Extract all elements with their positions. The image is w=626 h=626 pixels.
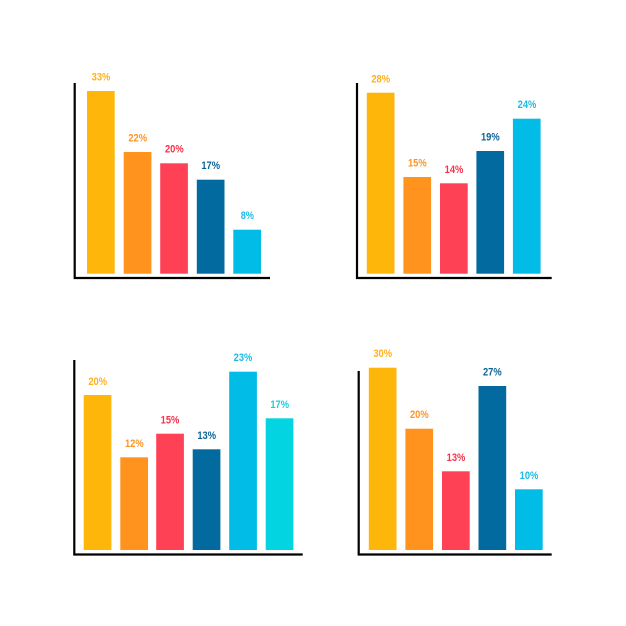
bar 22%: 22% bbox=[128, 132, 147, 144]
bar 14%: 14% bbox=[445, 164, 464, 176]
bar 8%: 8% bbox=[241, 210, 254, 222]
bar 20%: 20% bbox=[165, 144, 184, 156]
bar 20% bbox=[405, 409, 433, 550]
axes bbox=[75, 83, 270, 278]
bar 28%: 28% bbox=[371, 74, 390, 86]
bar 33%: 33% bbox=[92, 72, 111, 84]
bar 15%: 15% bbox=[408, 158, 427, 170]
bar 17% bbox=[197, 160, 224, 274]
bar 20% bbox=[160, 144, 188, 274]
bar 20%: 20% bbox=[88, 376, 107, 388]
bar 28% bbox=[367, 74, 394, 274]
bar 20% bbox=[84, 376, 111, 550]
bar 15% bbox=[403, 158, 431, 274]
bar 23%: 23% bbox=[234, 352, 253, 364]
bar 10%: 10% bbox=[520, 470, 539, 482]
bar 17% bbox=[266, 399, 293, 550]
bar 20%: 20% bbox=[410, 409, 429, 421]
bar 13%: 13% bbox=[197, 430, 216, 442]
bar 33% bbox=[87, 72, 115, 274]
bar 15%: 15% bbox=[161, 414, 180, 426]
bar 24% bbox=[513, 99, 541, 274]
bar 23% bbox=[229, 352, 257, 550]
chart: bottom-left bar chart bbox=[74, 352, 303, 554]
bar 30% bbox=[369, 348, 396, 550]
bar 10% bbox=[515, 470, 543, 550]
bar 17%: 17% bbox=[201, 160, 220, 172]
bar 30%: 30% bbox=[373, 348, 392, 360]
bar 15% bbox=[156, 414, 184, 550]
bar 27% bbox=[478, 366, 506, 550]
axes bbox=[357, 83, 552, 278]
bar 19% bbox=[476, 132, 504, 274]
chart: top-right bar chart bbox=[357, 74, 552, 278]
bar 13%: 13% bbox=[447, 452, 466, 464]
bar 19%: 19% bbox=[481, 132, 500, 144]
chart: top-left bar chart bbox=[75, 72, 270, 278]
bar 8% bbox=[233, 210, 261, 274]
bar 14% bbox=[440, 164, 468, 274]
axes bbox=[74, 360, 303, 554]
bar 22% bbox=[124, 132, 151, 274]
bar 24%: 24% bbox=[518, 99, 537, 111]
bar 13% bbox=[193, 430, 220, 550]
axes bbox=[359, 371, 552, 554]
chart: bottom-right bar chart bbox=[359, 348, 552, 554]
bar 12%: 12% bbox=[125, 438, 144, 450]
bar 13% bbox=[442, 452, 470, 550]
bar 27%: 27% bbox=[483, 366, 502, 378]
bar 12% bbox=[120, 438, 148, 550]
bar 17%: 17% bbox=[270, 399, 289, 411]
